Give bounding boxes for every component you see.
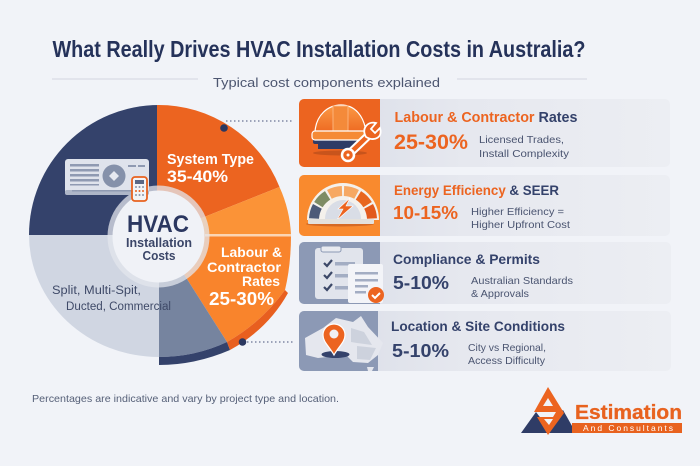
centre circle — [112, 190, 204, 282]
centre label: Costs — [142, 248, 176, 263]
rim: orange — [227, 290, 288, 350]
description: City vs Regional, — [468, 342, 546, 354]
connector: bottom dot and dotted line — [239, 338, 293, 346]
label: system type: System Type — [167, 152, 254, 168]
logo wordmark: Estimation — [575, 402, 682, 424]
description: Australian Standards — [471, 275, 573, 287]
label: labour and contractor: Rates — [242, 273, 280, 289]
centre label: HVAC — [127, 211, 189, 238]
rim: navy — [159, 342, 230, 365]
title: What Really Drives HVAC Installation Costs in Australia? — [52, 36, 586, 62]
percentage: 5-10% — [392, 340, 449, 361]
logo: Estimation and Consultants — [521, 387, 682, 435]
slice: air conditioning navy quadrant — [29, 105, 159, 235]
label: labour and contractor: 25-30% — [209, 288, 274, 309]
icon: checklist and document — [315, 246, 384, 303]
icon: map of Australia with pin — [305, 316, 383, 371]
connector: top dot and dotted line — [220, 121, 293, 132]
heading: Location & Site Conditions — [391, 318, 565, 334]
label: split system types: Ducted, Commercial — [66, 301, 171, 313]
description: Install Complexity — [479, 148, 570, 160]
description — [471, 206, 570, 231]
slice: system type — [157, 105, 280, 235]
slice: slate — [159, 235, 227, 357]
icon: efficiency gauge — [306, 183, 379, 226]
slice: labour and contractor rates — [159, 235, 291, 342]
percentage: 10-15% — [393, 202, 458, 223]
description: & Approvals — [471, 288, 529, 300]
slice: grey split system — [29, 235, 159, 357]
centre label — [126, 211, 192, 263]
description: Licensed Trades, — [479, 134, 564, 146]
icon: air conditioner — [65, 159, 149, 195]
description: Higher Upfront Cost — [471, 219, 570, 231]
label: split system types — [52, 285, 171, 313]
logo tagline: And Consultants — [583, 423, 673, 433]
label: split system types: Split, Multi-Spit, — [52, 285, 141, 297]
label: system type — [167, 152, 254, 186]
label: labour and contractor — [207, 244, 282, 309]
centre label: Installation — [126, 235, 192, 250]
description: Access Difficulty — [468, 355, 546, 367]
percentage: 5-10% — [393, 272, 449, 293]
slice: light orange — [159, 187, 291, 235]
description: Higher Efficiency = — [471, 206, 564, 218]
label: system type: 35-40% — [167, 167, 228, 186]
description — [471, 275, 573, 300]
label: labour and contractor: Contractor — [207, 259, 282, 275]
heading: Labour & Contractor Rates — [394, 110, 578, 126]
percentage: 25-30% — [394, 131, 468, 154]
centre ring — [108, 186, 210, 288]
logo mark — [521, 387, 576, 435]
label: labour and contractor: Labour & — [221, 244, 282, 260]
panel: energy efficiency and SEER — [299, 175, 670, 236]
icon: hard hat and wrench — [312, 105, 381, 161]
panel: labour and contractor rates — [299, 99, 670, 167]
footnote: Percentages are indicative and vary by project type and location. — [32, 393, 339, 405]
panel: compliance and permits — [299, 242, 671, 304]
heading: Compliance & Permits — [393, 251, 540, 267]
panel: location and site conditions — [299, 311, 671, 371]
icon: remote control — [132, 177, 147, 201]
pie chart: HVAC cost breakdown — [29, 105, 291, 365]
description — [479, 134, 570, 160]
description — [468, 342, 546, 367]
subtitle: Typical cost components explained — [213, 75, 440, 90]
heading: Energy Efficiency & SEER — [394, 182, 559, 198]
